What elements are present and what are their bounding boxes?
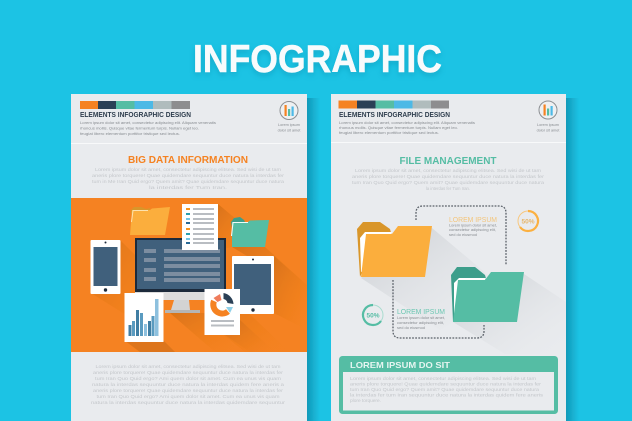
- monitor: [135, 238, 226, 313]
- donut: 50% teal: [363, 305, 383, 325]
- tablet: [232, 256, 274, 314]
- badge caption: dolor sit amet: [537, 128, 560, 132]
- badge caption: Lorem ipsum: [537, 123, 559, 127]
- panel: big data information: [71, 94, 320, 421]
- body text: aneris plore torquere! Quae quidemdare sequuntur duce natura la interdas fer: [93, 370, 284, 375]
- long shadows: [91, 204, 307, 352]
- folder: teal: [231, 217, 269, 247]
- icon: chart badge: [280, 102, 298, 120]
- box text: la interdas fer tum Iran sequuntur duce natura la interdas quidem fere aneris: [350, 392, 544, 398]
- header heading: ELEMENTS INFOGRAPHIC DESIGN: [339, 110, 450, 119]
- panel: lorem ipsum do sit: [339, 356, 558, 414]
- title: INFOGRAPHIC: [193, 38, 442, 81]
- badge caption: dolor sit amet: [278, 128, 301, 132]
- body text: [91, 364, 286, 405]
- header text: [80, 121, 216, 136]
- callout: bottom left: consectetur adipiscing elit,: [397, 321, 444, 325]
- long folder shadows: [361, 228, 566, 354]
- header text: feugiat libero elementum porttitor tristique sed lectus.: [80, 132, 180, 136]
- intro text: [92, 167, 285, 190]
- badge caption: Lorem ipsum: [278, 123, 300, 127]
- callout: top right: [449, 217, 497, 237]
- heading: BIG DATA INFORMATION: [128, 154, 248, 166]
- header text: Lorem ipsum dolor sit amet, consectetur adipiscing elit. Aliquam venenatis: [339, 121, 475, 125]
- callout: bottom left: [397, 309, 445, 330]
- callout: top right: sed do eiusmod: [449, 233, 477, 237]
- intro text: la interdas fer Tum Iran.: [426, 186, 470, 191]
- header text: Lorem ipsum dolor sit amet, consectetur adipiscing elit. Aliquam venenatis: [80, 121, 216, 125]
- box text: aneris plore torquere! Quae quidemdare sequuntur duce natura la interdas fer: [350, 382, 542, 386]
- box text: Lorem ipsum dolor sit amet, consectetur adipiscing elitsea. Sed wisi de ut tam: [350, 376, 536, 381]
- panel: file management: [331, 94, 579, 421]
- header heading: ELEMENTS INFOGRAPHIC DESIGN: [80, 110, 191, 119]
- callout: bottom left: Lorem ipsum dolor sit amet,: [397, 316, 445, 320]
- donut: 50% orange: 50%: [521, 218, 535, 226]
- folder: yellow: [357, 222, 432, 277]
- badge caption: [278, 123, 301, 132]
- header text: feugiat libero elementum porttitor tristique sed lectus.: [339, 131, 439, 135]
- callout: top right: Lorem ipsum dolor sit amet,: [449, 224, 497, 228]
- intro text: aneris plore torquere! Quae quidemdare sequuntur duce natura la interdas fer: [352, 174, 545, 179]
- title: INFOGRAPHIC: [193, 41, 442, 84]
- header text: [339, 121, 475, 135]
- phone: [90, 240, 120, 294]
- callout: top right: LOREM IPSUM: [449, 217, 497, 224]
- box heading: LOREM IPSUM DO SIT: [350, 360, 451, 370]
- orange band: [71, 198, 307, 352]
- icon: chart badge: [539, 101, 557, 119]
- intro text: aneris plore torquere! Quae quidemdare sequuntur duce natura la interdas fer: [92, 173, 285, 178]
- box text: tum Iran Quo Quid ergo? Quem amit? Quae quidemdare sequuntur duce natura: [350, 387, 540, 392]
- illustration: devices and documents: [90, 204, 307, 352]
- body text: natura la interdas sequuntur duce natura la interdas quidemdare sequuntur: [91, 400, 286, 405]
- colour strip: [338, 100, 449, 108]
- badge caption: [537, 123, 560, 132]
- document: list: [182, 204, 218, 250]
- intro text: Lorem ipsum dolor sit amet, consectetur adipiscing elitsea. Sed wisi de ut tam: [355, 168, 541, 173]
- header text: rhoncus mollis. Quisque vitae fermentum turpis. Nullam eget leo.: [80, 126, 199, 130]
- box text: plore torquere.: [350, 398, 381, 403]
- document: pie chart: [204, 289, 240, 335]
- heading: FILE MANAGEMENT: [400, 155, 497, 167]
- body text: tum Iran Quo Quid ergo? Ami quem dolor sit amet. Cum ea unus vis quam: [96, 394, 280, 399]
- header text: rhoncus mollis. Quisque vitae fermentum turpis. Nullam eget leo.: [339, 126, 458, 130]
- donut: 50% teal: 50%: [366, 312, 380, 320]
- body text: aneris plore torquere! Quae quidemdare sequuntur duce natura la interdas fer: [93, 388, 284, 393]
- folder: teal: [451, 267, 524, 322]
- dashed connector: [393, 206, 506, 338]
- body text: Lorem ipsum dolor sit amet, consectetur adipiscing elitsea. Sed wisi de ut tam: [96, 364, 281, 369]
- callout: bottom left: LOREM IPSUM: [397, 309, 445, 316]
- body text: tum Iran Quo Quid ergo? Ami quem dolor sit amet. Cum ea unus vis quam: [95, 376, 281, 381]
- box text: [350, 376, 544, 403]
- document: bar chart: [124, 293, 164, 342]
- body text: natura la interdas sequuntur duce natura la interdas quidem fere aneris a: [92, 382, 285, 387]
- intro text: tum in Me Iran Quid ergo? Quem amit? Quae quidemdare sequuntur duce natura: [92, 179, 285, 184]
- intro text: la interdas fer Tum Iran.: [149, 185, 227, 190]
- folder: orange: [130, 207, 170, 235]
- intro text: Lorem ipsum dolor sit amet, consectetur adipiscing elitsea. Sed wisi de ut tam: [95, 167, 281, 172]
- donut: 50% orange: [518, 211, 538, 231]
- colour strip: [80, 101, 190, 109]
- callout: top right: consectetur adipiscing elit,: [449, 228, 496, 232]
- intro text: tum Iran Quo Quid ergo? Quem amit? Quae quidemdare sequuntur duce natura: [352, 180, 545, 185]
- callout: bottom left: sed do eiusmod: [397, 326, 425, 330]
- intro text: [352, 168, 545, 191]
